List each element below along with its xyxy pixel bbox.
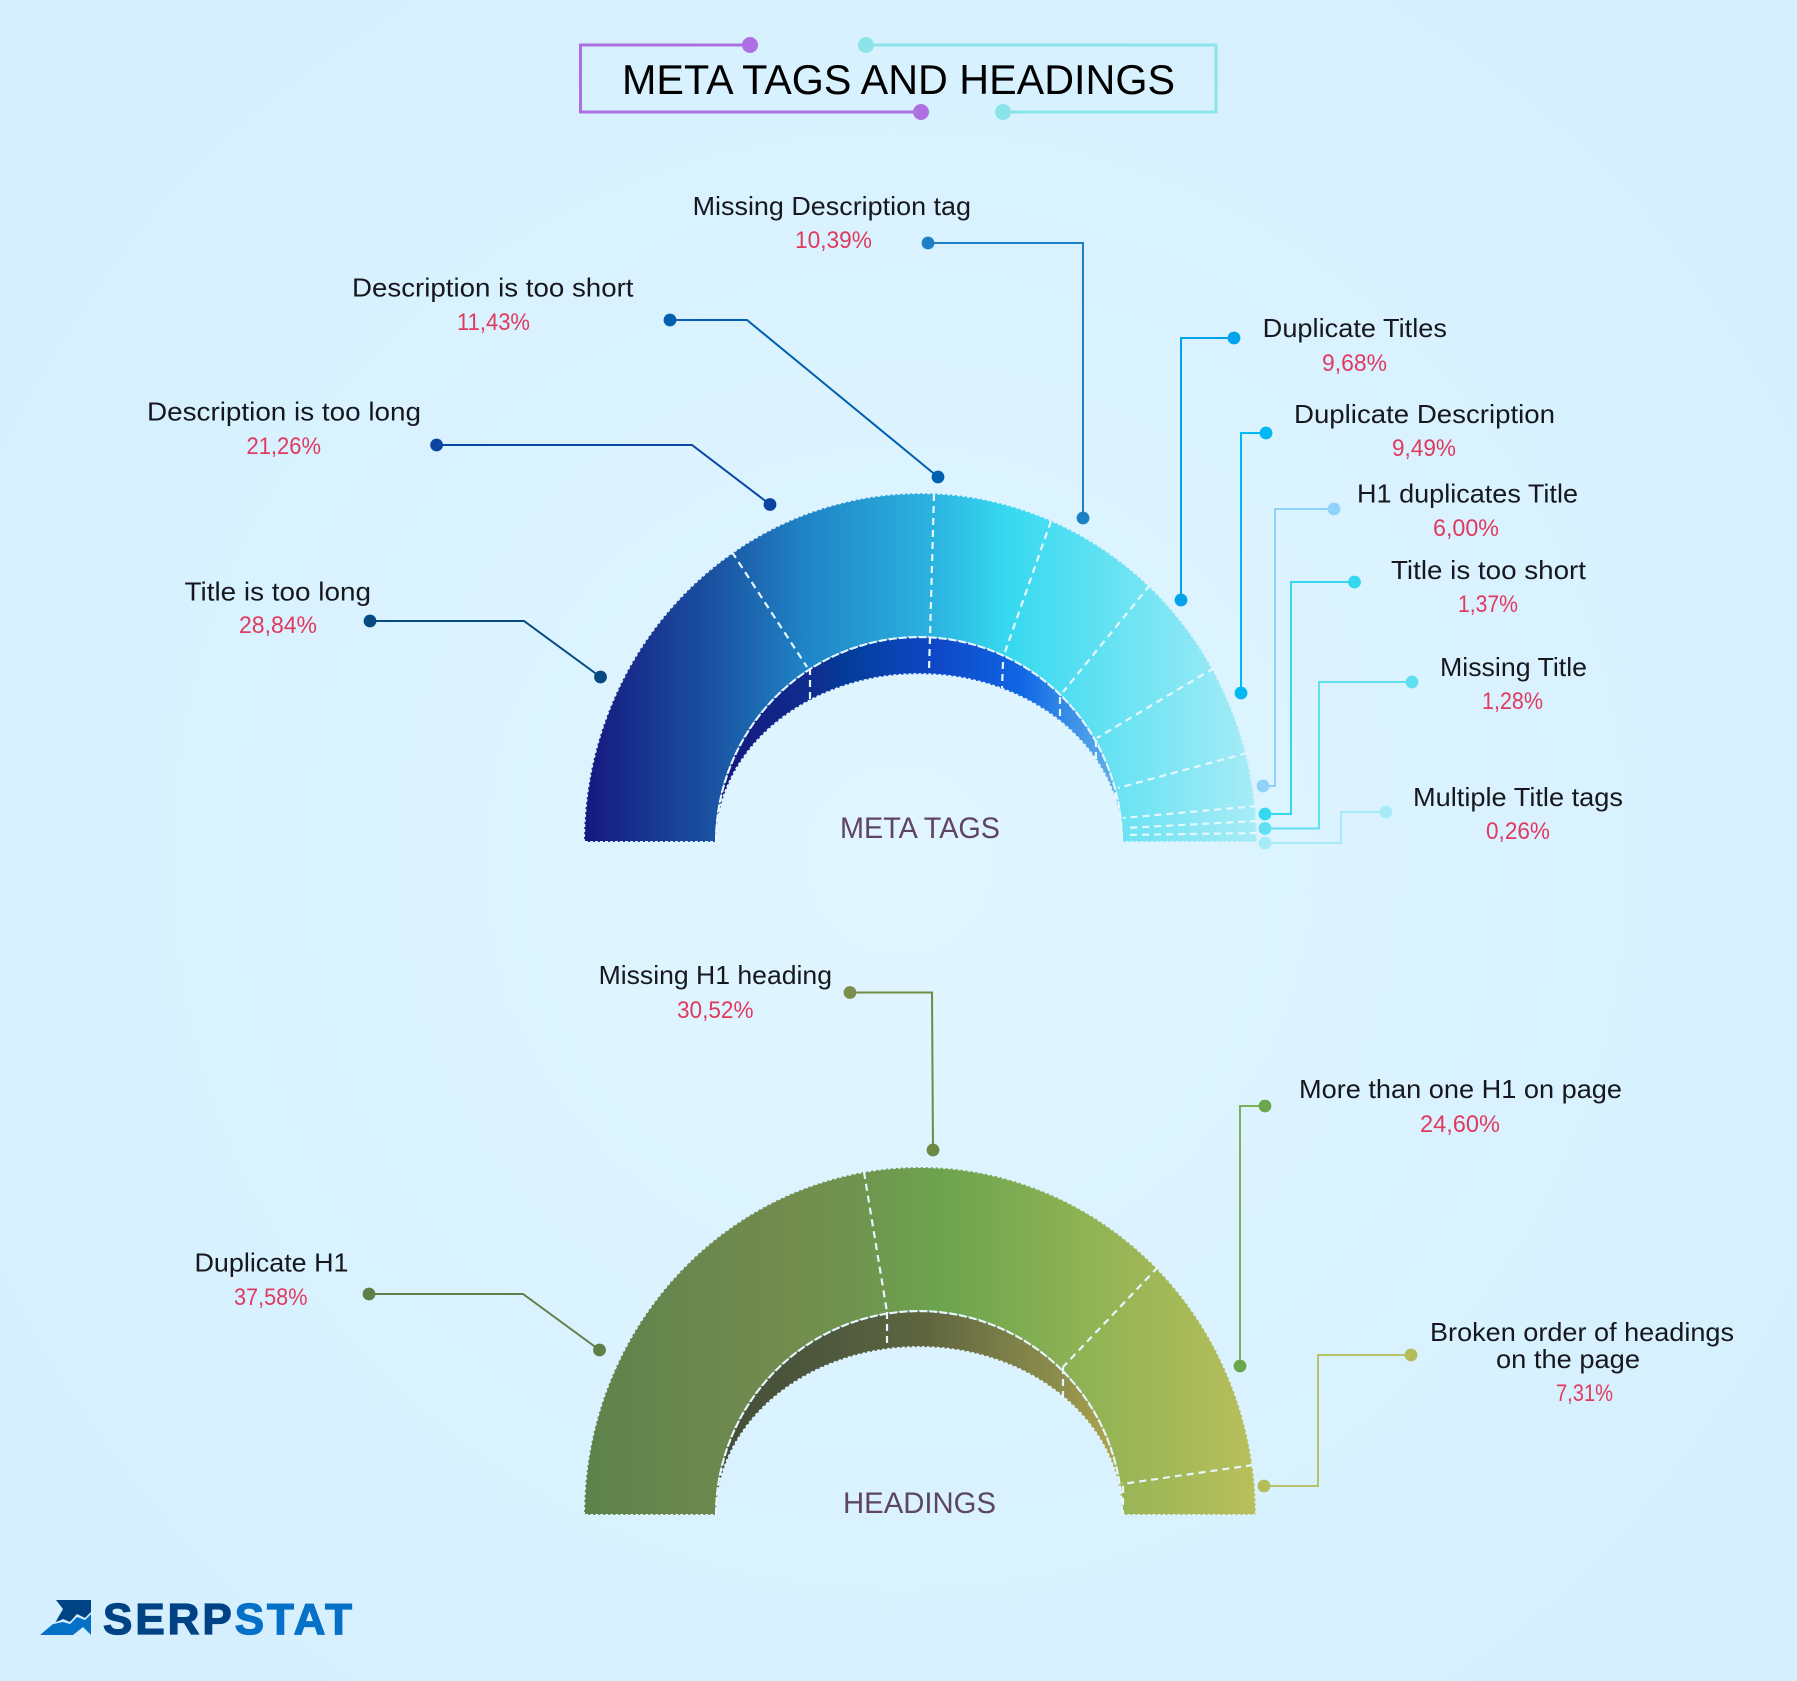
callout: Description is too short 11,43%: Description is too short — [352, 273, 634, 303]
title text: META TAGS AND HEADINGS — [622, 56, 1175, 103]
callout: Duplicate H1 37,58%: Duplicate H1 — [194, 1248, 348, 1278]
icon: chart arrow — [40, 1600, 91, 1635]
callout: Title is too short 1,37%: 1,37% — [1458, 591, 1518, 618]
callout: More than one H1 on page 24,60%: 24,60% — [1420, 1111, 1500, 1138]
callout: H1 duplicates Title 6,00%: H1 duplicates Title — [1357, 479, 1578, 509]
callout: Missing Description tag 10,39% — [693, 191, 1089, 524]
callout: Missing Title 1,28% — [1259, 652, 1587, 835]
callout: Duplicate Titles 9,68%: Duplicate Titles — [1263, 313, 1447, 343]
chart: headings semi-donut — [584, 1167, 1256, 1520]
chart: meta tags semi-donut — [584, 493, 1257, 845]
callout: Missing Title 1,28%: 1,28% — [1482, 688, 1543, 715]
callout: Title is too long 28,84%: Title is too long — [184, 577, 371, 607]
callout: Description is too long 21,26%: Description is too long — [147, 397, 421, 427]
callout: H1 duplicates Title 6,00% — [1257, 479, 1578, 792]
callout: Missing Description tag 10,39%: Missing Description tag — [693, 191, 971, 221]
title block — [580, 37, 1216, 120]
callout: Description is too short 11,43% — [352, 273, 944, 483]
callout: Duplicate Description 9,49%: Duplicate Description — [1294, 399, 1555, 429]
title frame: cyan bracket — [858, 37, 1216, 120]
callout: Multiple Title tags 0,26% — [1259, 782, 1623, 849]
callout: More than one H1 on page 24,60%: More than one H1 on page — [1299, 1074, 1622, 1104]
outer arch — [584, 493, 1257, 842]
callout: Duplicate Titles 9,68% — [1175, 313, 1447, 606]
inner dark crescent — [716, 637, 1122, 842]
callout: Broken order of headings on the page 7,31%: 7,31% — [1556, 1380, 1613, 1407]
callout: More than one H1 on page 24,60% — [1234, 1074, 1622, 1372]
callout: Missing H1 heading 30,52%: Missing H1 heading — [599, 960, 832, 990]
callout: Multiple Title tags 0,26%: Multiple Title tags — [1413, 782, 1623, 812]
callout: Duplicate H1 37,58% — [194, 1248, 606, 1356]
callout: Title is too short 1,37%: Title is too short — [1391, 555, 1587, 585]
callout: Title is too short 1,37% — [1259, 555, 1587, 820]
callout: Description is too long 21,26% — [147, 397, 776, 511]
callout: Missing Title 1,28%: Missing Title — [1440, 652, 1587, 682]
callout: Multiple Title tags 0,26%: 0,26% — [1486, 818, 1550, 845]
callout: Broken order of headings on the page 7,31% — [1258, 1317, 1734, 1492]
outer arch — [584, 1167, 1256, 1515]
callout: Broken order of headings on the page 7,31%: on the page — [1496, 1344, 1640, 1374]
callout: H1 duplicates Title 6,00%: 6,00% — [1433, 515, 1499, 542]
callout: Duplicate Titles 9,68%: 9,68% — [1322, 350, 1387, 377]
callout: Description is too long 21,26%: 21,26% — [246, 433, 321, 460]
callout: Missing H1 heading 30,52%: 30,52% — [677, 997, 754, 1024]
callout: Duplicate Description 9,49% — [1235, 399, 1555, 699]
callout: Duplicate H1 37,58%: 37,58% — [234, 1284, 308, 1311]
callout: Missing Description tag 10,39%: 10,39% — [795, 227, 872, 254]
callout: Title is too long 28,84%: 28,84% — [239, 612, 317, 639]
section label: meta tags: META TAGS — [840, 812, 1000, 845]
callout: Duplicate Description 9,49%: 9,49% — [1392, 435, 1456, 462]
callout: Title is too long 28,84% — [184, 577, 607, 683]
section label: headings: HEADINGS — [843, 1487, 996, 1520]
inner dark crescent — [716, 1311, 1122, 1515]
callout: Description is too short 11,43%: 11,43% — [457, 309, 530, 336]
title frame: purple bracket — [580, 37, 929, 120]
callout: Broken order of headings on the page 7,31%: Broken order of headings — [1430, 1317, 1734, 1347]
callout: Missing H1 heading 30,52% — [599, 960, 939, 1156]
logo: Serpstat — [40, 1595, 352, 1644]
wordmark: SERPSTAT — [103, 1595, 352, 1644]
